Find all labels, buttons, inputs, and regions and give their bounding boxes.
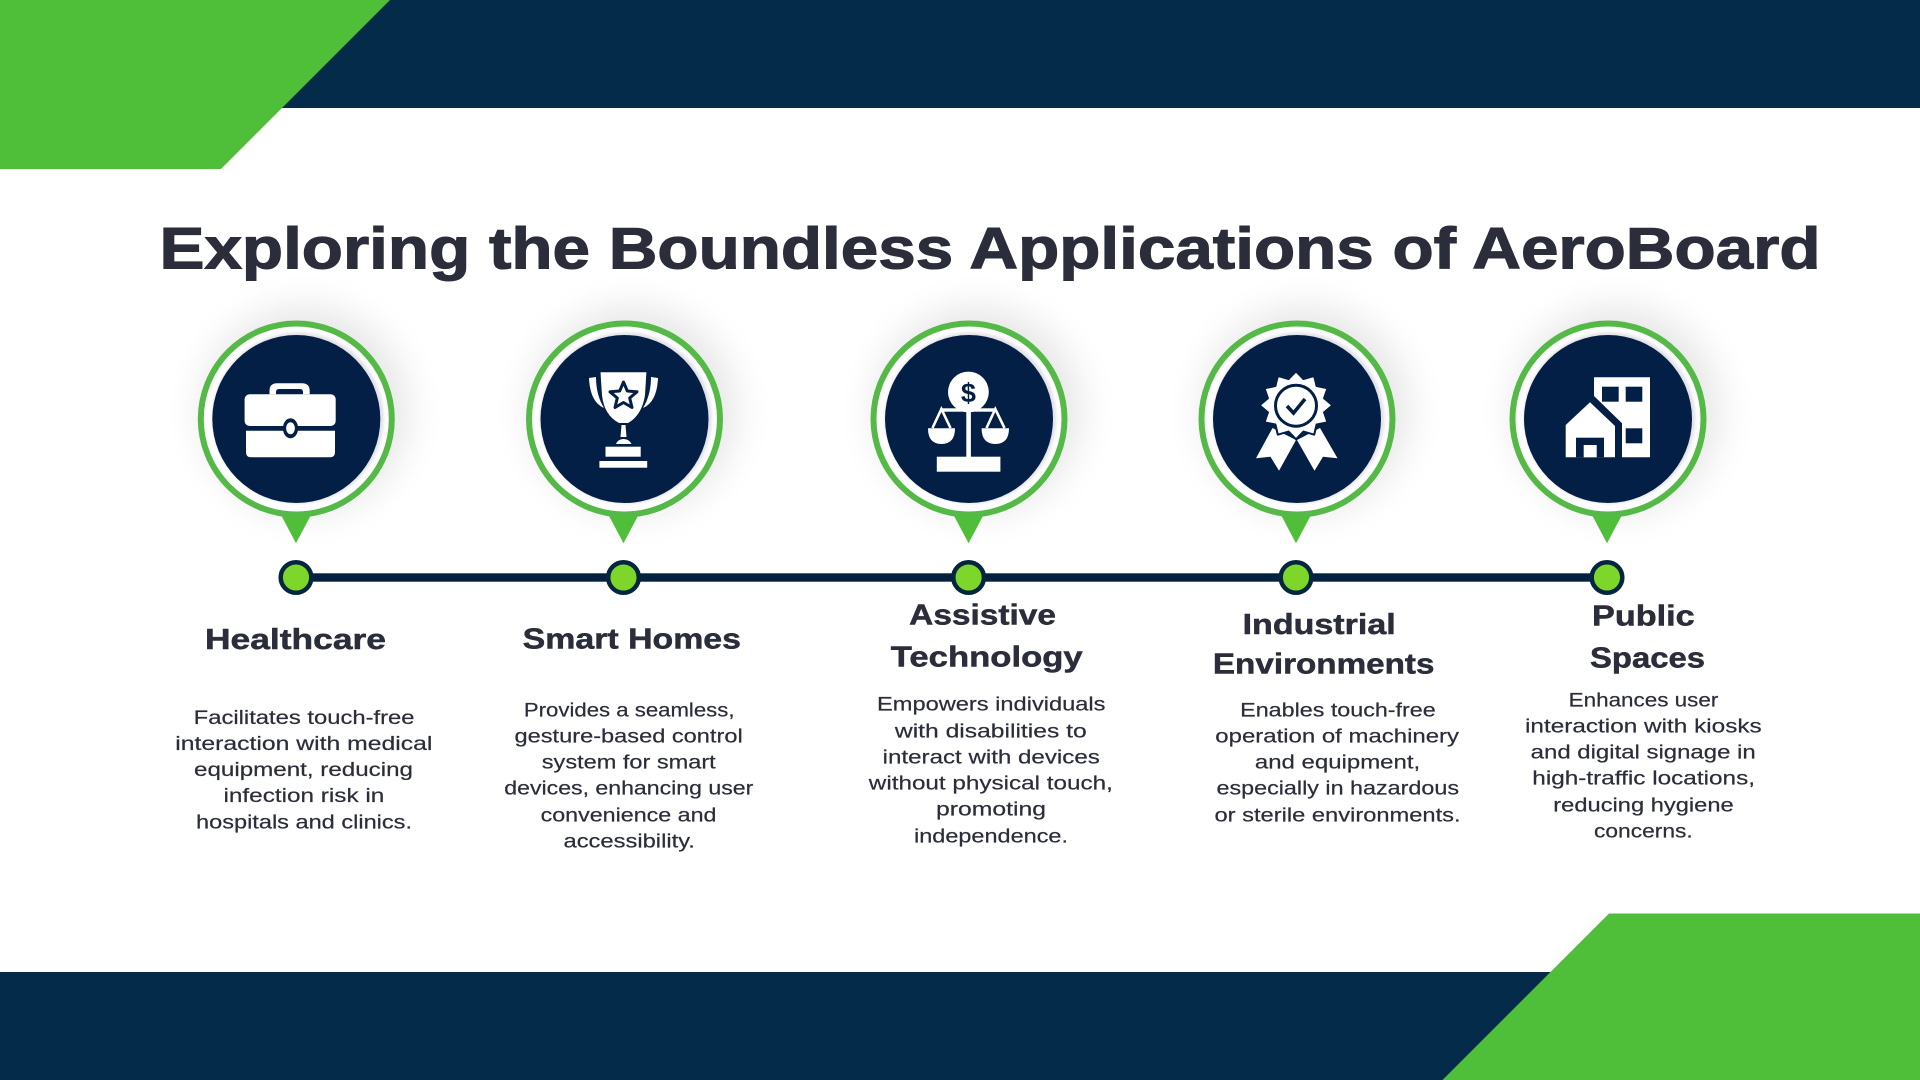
icon: scales with dollar coin: $ <box>961 378 976 408</box>
description: accessibility. <box>564 831 695 852</box>
heading: Technology <box>891 642 1083 674</box>
heading <box>891 600 1083 674</box>
description: interaction with medical <box>175 734 432 755</box>
heading: Public <box>1592 601 1695 633</box>
timeline dot <box>1281 562 1311 593</box>
panel: Assistive Technology <box>868 308 1113 848</box>
description: convenience and <box>541 805 716 826</box>
description: devices, enhancing user <box>504 779 754 800</box>
heading: Healthcare <box>205 624 386 656</box>
panel: Public Spaces <box>1512 308 1762 842</box>
timeline dot <box>953 562 984 593</box>
description: gesture-based control <box>514 727 743 748</box>
description <box>868 695 1113 848</box>
description: system for smart <box>542 753 717 774</box>
description: Empowers individuals <box>877 695 1106 716</box>
heading: Industrial <box>1243 609 1396 641</box>
heading: Smart Homes <box>523 624 741 656</box>
description: high-traffic locations, <box>1532 769 1755 790</box>
heading: Assistive <box>909 600 1056 632</box>
pin: Healthcare <box>201 308 407 543</box>
heading: Environments <box>1213 648 1434 680</box>
description: infection risk in <box>224 786 384 807</box>
panel: Smart Homes <box>504 308 754 852</box>
heading <box>1590 601 1705 675</box>
description: or sterile environments. <box>1214 806 1461 827</box>
description: interaction with kiosks <box>1525 717 1762 738</box>
description: with disabilities to <box>894 721 1087 742</box>
pin: Smart Homes <box>529 308 735 543</box>
pin: Public Spaces <box>1512 308 1719 543</box>
pin: Assistive Technology <box>874 308 1080 543</box>
description: Enhances user <box>1569 691 1719 712</box>
description: concerns. <box>1594 821 1693 842</box>
description: without physical touch, <box>868 773 1113 794</box>
icon: scales with dollar coin <box>928 372 1009 472</box>
description: promoting <box>936 800 1046 821</box>
description: hospitals and clinics. <box>196 813 412 834</box>
description: Enables touch-free <box>1240 701 1436 722</box>
description: Facilitates touch-free <box>194 708 414 729</box>
pin: Industrial Environments <box>1202 308 1408 543</box>
description: interact with devices <box>883 747 1100 768</box>
icon: briefcase <box>245 383 336 457</box>
top banner <box>0 0 1920 169</box>
timeline dot <box>1592 562 1622 593</box>
description <box>504 701 754 852</box>
heading: Spaces <box>1590 643 1705 675</box>
timeline line <box>296 573 1607 582</box>
description: operation of machinery <box>1215 727 1460 748</box>
icon: trophy <box>589 372 658 468</box>
icon: house and building <box>1566 377 1650 457</box>
timeline dot <box>281 562 311 593</box>
description <box>1214 701 1461 827</box>
icon: award rosette <box>1256 371 1338 471</box>
timeline dot <box>608 562 639 593</box>
description: Provides a seamless, <box>524 701 734 722</box>
heading <box>1213 609 1434 680</box>
panel: Healthcare <box>175 308 432 834</box>
bottom banner <box>0 914 1920 1080</box>
description: reducing hygiene <box>1553 795 1734 816</box>
panel: Industrial Environments <box>1202 308 1461 827</box>
description: equipment, reducing <box>194 760 413 781</box>
description <box>1525 691 1762 842</box>
description <box>175 708 432 834</box>
title: Exploring the Boundless Applications of AeroBoard <box>160 216 1820 282</box>
description: independence. <box>914 827 1068 848</box>
description: especially in hazardous <box>1216 779 1459 800</box>
description: and digital signage in <box>1531 743 1756 764</box>
description: and equipment, <box>1255 753 1420 774</box>
